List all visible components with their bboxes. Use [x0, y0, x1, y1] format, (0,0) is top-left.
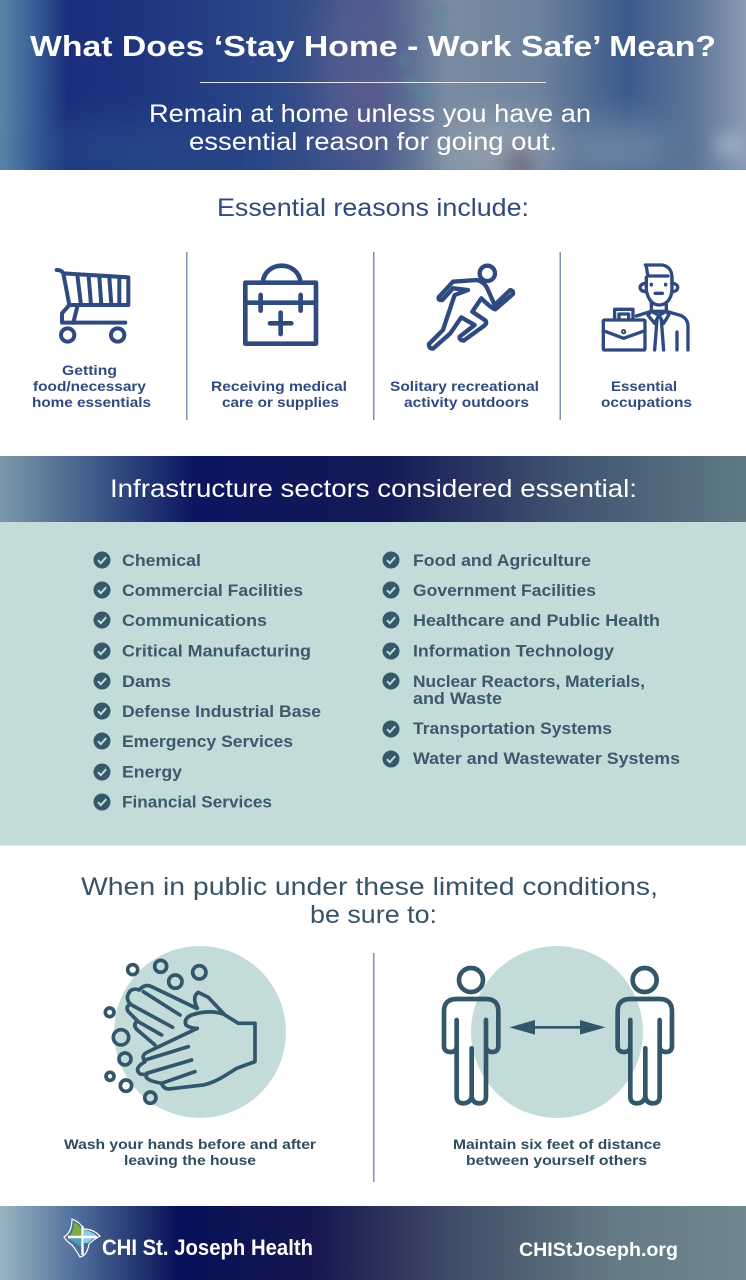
- list: sectors left column: Defense Industrial Base: [122, 703, 321, 721]
- icon: double arrow: [509, 1020, 605, 1035]
- caption: six feet distance: between yourself others: [466, 1152, 647, 1168]
- heading: infrastructure sectors: Infrastructure sectors considered essential:: [110, 475, 637, 503]
- subtitle: [149, 100, 591, 156]
- list: sectors left column: Financial Services: [122, 794, 272, 812]
- list: sectors right column: Food and Agriculture: [413, 552, 591, 570]
- list: sectors right column: and Waste: [413, 690, 502, 708]
- label: getting food: [32, 362, 151, 410]
- label: recreational activity: activity outdoors: [404, 394, 529, 410]
- label: recreational activity: [390, 378, 539, 410]
- title: What Does ‘Stay Home - Work Safe’ Mean?: [30, 31, 716, 63]
- list: sectors left column: Commercial Facilities: [122, 582, 303, 600]
- icon: CHI St. Joseph logo: [64, 1219, 100, 1257]
- icon: runner: [429, 266, 513, 349]
- caption: wash hands: [64, 1136, 317, 1168]
- caption: six feet distance: [453, 1136, 661, 1168]
- list: sectors left column: Chemical: [122, 552, 201, 570]
- list: sectors right column: Nuclear Reactors, Materials,: [413, 673, 645, 691]
- icon: two people at six feet: [444, 946, 672, 1118]
- label: recreational activity: Solitary recreational: [390, 378, 539, 394]
- icon: medical bag: [245, 266, 316, 344]
- label: medical care: [211, 378, 347, 410]
- label: essential occupations: [601, 378, 692, 410]
- label: essential occupations: Essential: [611, 378, 677, 394]
- list: sectors left column: Communications: [122, 612, 267, 630]
- label: medical care: Receiving medical: [211, 378, 347, 394]
- heading: when in public: When in public under these limited conditions,: [81, 873, 658, 901]
- panel: sector list: [0, 522, 746, 846]
- list: sectors right column: Transportation Systems: [413, 720, 612, 738]
- list: sectors right column: Information Technology: [413, 642, 615, 660]
- list: sectors right column: [382, 552, 680, 768]
- label: getting food: home essentials: [32, 394, 151, 410]
- panel: footer: [0, 1206, 746, 1280]
- icon: washing hands: [105, 946, 286, 1118]
- caption: wash hands: Wash your hands before and after: [64, 1136, 317, 1152]
- header background with virus image: [0, 0, 746, 186]
- heading: essential reasons: Essential reasons include:: [217, 194, 529, 222]
- logo wordmark: CHI St. Joseph Health: [102, 1235, 313, 1260]
- heading: when in public: be sure to:: [310, 901, 437, 929]
- panel: public conditions: [64, 873, 672, 1182]
- caption: six feet distance: Maintain six feet of distance: [453, 1136, 661, 1152]
- label: medical care: care or supplies: [222, 394, 339, 410]
- icon: businessman with briefcase: [603, 265, 688, 350]
- list: sectors left column: Critical Manufacturing: [122, 642, 311, 660]
- list: sectors left column: [94, 552, 321, 812]
- label: getting food: food/necessary: [33, 378, 146, 394]
- list: sectors right column: Water and Wastewater Systems: [413, 750, 680, 768]
- website: CHIStJoseph.org: [519, 1239, 678, 1261]
- list: sectors right column: Healthcare and Public Health: [413, 612, 660, 630]
- panel: infrastructure banner: [0, 456, 746, 522]
- icon: shopping cart: [57, 270, 128, 342]
- list: sectors right column: Government Facilities: [413, 582, 596, 600]
- label: getting food: Getting: [62, 362, 117, 378]
- panel: essential reasons: [32, 194, 692, 420]
- panel: header banner: [0, 0, 746, 186]
- caption: wash hands: leaving the house: [124, 1152, 256, 1168]
- label: essential occupations: occupations: [601, 394, 692, 410]
- heading: when in public: [81, 873, 658, 929]
- subtitle: Remain at home unless you have an: [149, 100, 591, 128]
- list: sectors left column: Dams: [122, 673, 171, 691]
- list: sectors left column: Emergency Services: [122, 733, 293, 751]
- list: sectors left column: Energy: [122, 764, 183, 782]
- subtitle: essential reason for going out.: [189, 128, 557, 156]
